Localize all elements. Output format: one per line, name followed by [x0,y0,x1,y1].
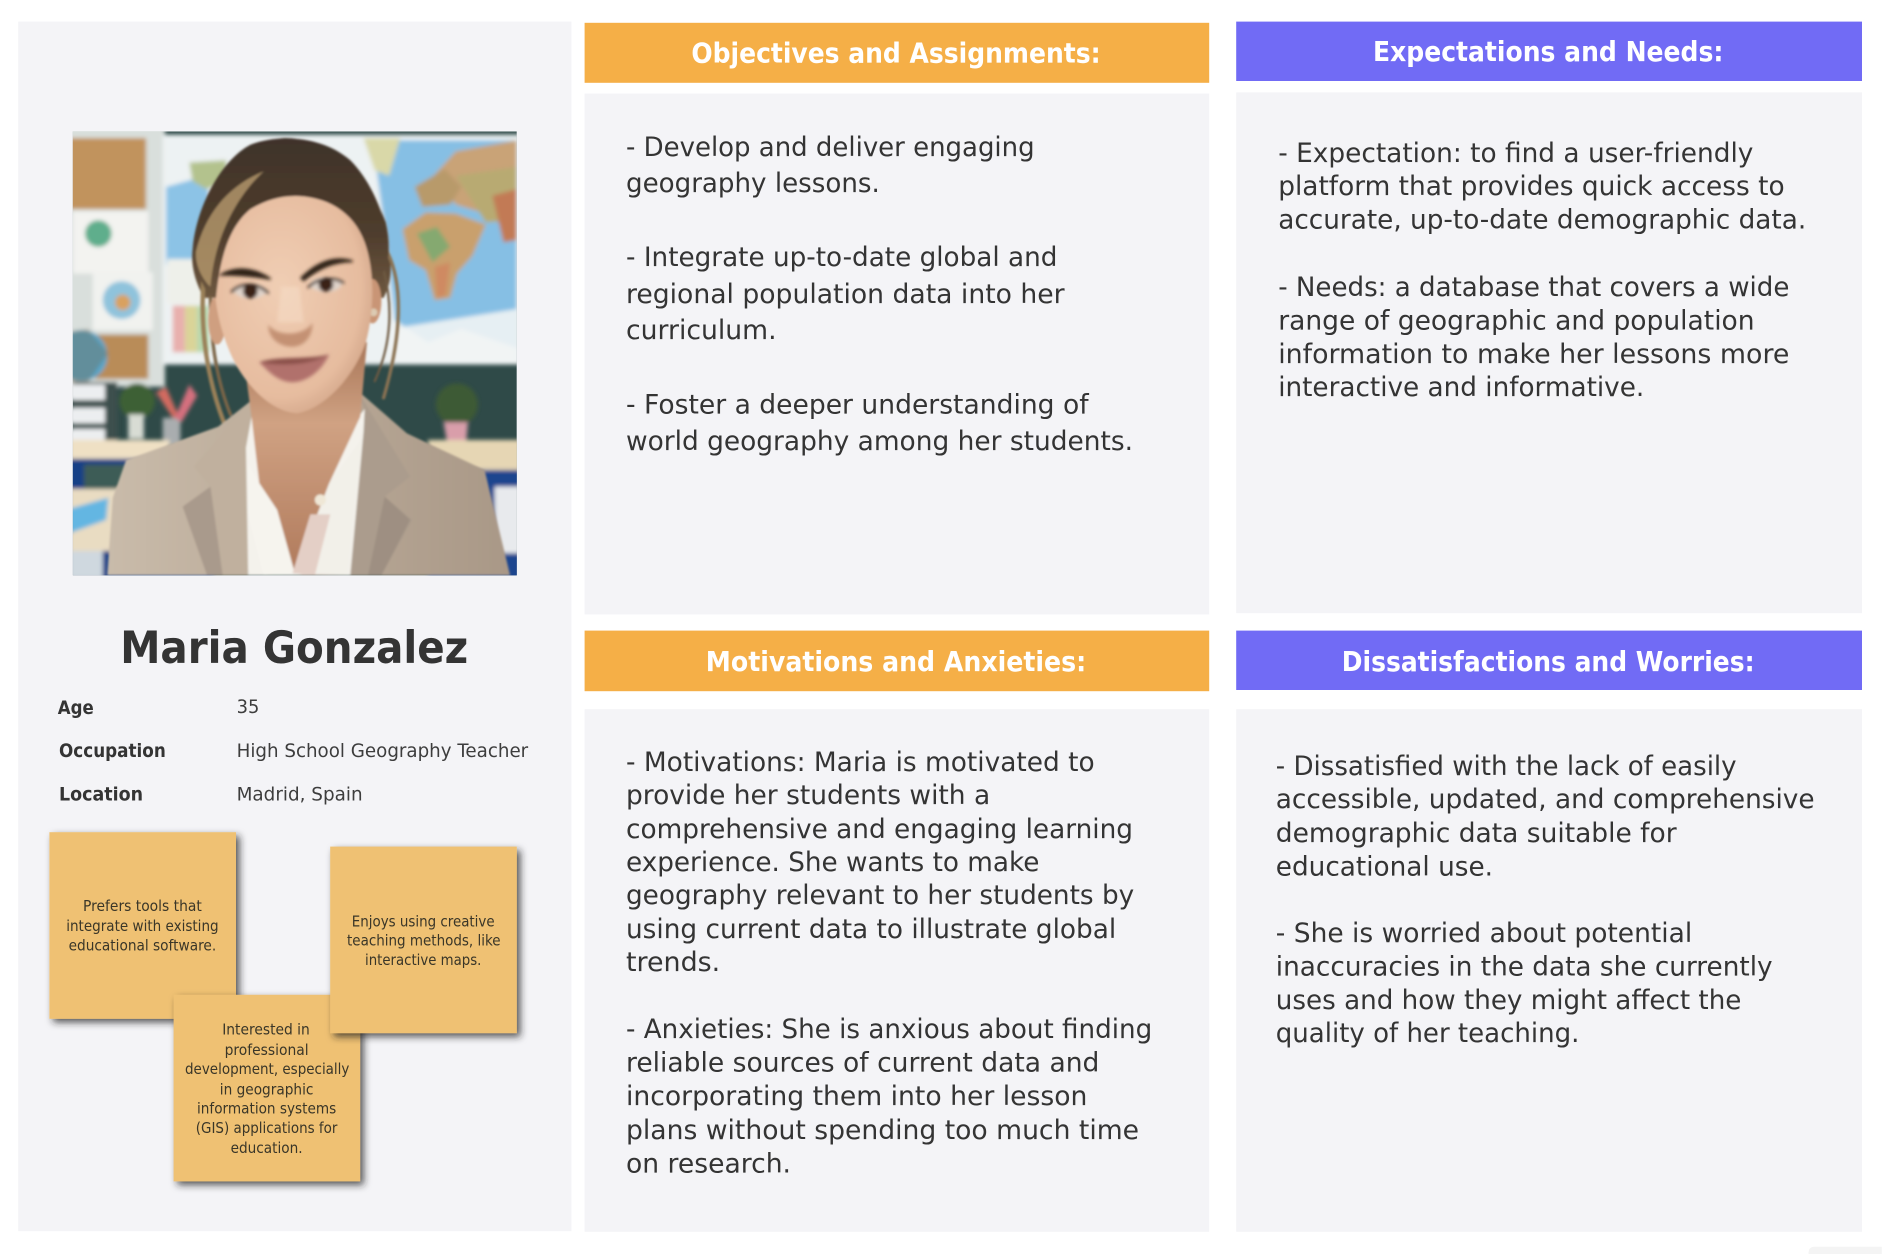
panel: dissatisfactions body: educational use. [1276,852,1493,882]
sticky note: teaching methods: Enjoys using creative [352,913,495,930]
shirt [246,409,365,575]
sticky note: professional development [174,995,360,1181]
lips [259,355,329,382]
details: occupation [59,741,529,762]
panel: motivations body: trends. [626,948,720,978]
panel: motivations body: geography relevant to her students by [626,881,1134,911]
details: occupation: Occupation [59,741,166,762]
eyes [235,284,266,298]
facial shading [277,287,304,322]
blazer [107,390,510,575]
sticky note: tools: Prefers tools that [83,898,202,915]
hair back [192,138,391,298]
panel: dissatisfactions header: Dissatisfactions and Worries: [1342,645,1755,678]
panel: dissatisfactions body: quality of her teaching. [1276,1019,1579,1049]
details: age [58,697,259,719]
details: location [59,784,363,805]
sticky note: professional development: in geographic [220,1081,313,1098]
brows [222,269,270,279]
sticky note: professional development: information systems [197,1101,336,1118]
panel: motivations header: Motivations and Anxieties: [706,645,1086,678]
details: location: Location [59,784,143,805]
details: age: Age [58,698,94,719]
panel: motivations body: plans without spending too much time [626,1116,1139,1146]
panel: objectives header [585,23,1209,83]
panel: motivations body: using current data to illustrate global [626,915,1116,945]
panel: expectations body [1236,92,1862,613]
details: occupation: High School Geography Teacher [237,741,529,762]
panel: motivations body: - Motivations: Maria is motivated to [626,748,1095,778]
sticky note: tools: educational software. [69,937,216,954]
panel: motivations header [585,631,1209,691]
panel: dissatisfactions body [1236,709,1862,1232]
panel: expectations body: range of geographic and population [1278,306,1755,336]
panel: expectations body: accurate, up-to-date demographic data. [1278,206,1806,236]
face [208,296,226,345]
sticky note: teaching methods: teaching methods, like [347,933,501,950]
panel: dissatisfactions header [1236,631,1862,690]
wall map [163,135,523,364]
sticky note: teaching methods [330,847,517,1033]
panel: motivations body: comprehensive and engaging learning [626,815,1133,845]
panel: dissatisfactions body: - Dissatisfied with the lack of easily [1276,752,1737,782]
hair front [194,138,389,298]
panel: motivations body [585,709,1209,1232]
details: age: 35 [237,697,259,718]
sticky note: professional development: (GIS) applications for [196,1120,338,1137]
panel: objectives body: - Integrate up-to-date global and [626,243,1057,273]
panel: motivations body: incorporating them into her lesson [626,1082,1087,1112]
loose wisps [203,254,398,422]
sticky note: professional development: professional [225,1042,309,1059]
panel: objectives body: geography lessons. [626,169,880,199]
panel: dissatisfactions body: - She is worried about potential [1276,919,1692,949]
panel: motivations body: experience. She wants to make [626,848,1039,878]
panel: objectives body: regional population data into her [626,280,1065,310]
panel: expectations body: platform that provides quick access to [1278,172,1785,202]
sticky note: teaching methods: interactive maps. [365,952,481,969]
details: location: Madrid, Spain [237,784,363,805]
panel: expectations body: interactive and informative. [1278,373,1644,403]
sticky note: tools [49,832,236,1019]
sticky note: professional development: education. [231,1140,303,1157]
neck [242,342,367,573]
panel: dissatisfactions body: uses and how they might affect the [1276,986,1741,1016]
panel: objectives header: Objectives and Assignments: [691,36,1101,69]
photo: teacher portrait in classroom [56,126,523,581]
panel: objectives body [585,94,1209,614]
heading: name: Maria Gonzalez [120,623,468,674]
panel: expectations header [1236,22,1862,81]
panel: motivations body: provide her students with a [626,781,990,811]
sticky note: professional development: development, especially [185,1061,350,1078]
sticky note: professional development: Interested in [222,1021,310,1038]
panel: motivations body: reliable sources of current data and [626,1049,1099,1079]
panel: objectives body: curriculum. [626,316,777,346]
panel: dissatisfactions body: inaccuracies in the data she currently [1276,953,1773,983]
panel: objectives body: world geography among her students. [626,427,1133,457]
panel: expectations header: Expectations and Needs: [1373,35,1723,68]
panel: motivations body: - Anxieties: She is anxious about finding [626,1015,1152,1045]
panel: objectives body: - Foster a deeper understanding of [626,390,1089,420]
panel: expectations body: information to make her lessons more [1278,340,1789,370]
panel: motivations body: on research. [626,1149,791,1179]
panel: dissatisfactions body: demographic data suitable for [1276,819,1677,849]
sticky note: tools: integrate with existing [66,918,219,935]
panel: profile [18,22,571,1231]
panel: dissatisfactions body: accessible, updated, and comprehensive [1276,785,1815,815]
panel: expectations body: - Needs: a database that covers a wide [1278,273,1789,303]
panel: objectives body: - Develop and deliver engaging [626,133,1035,163]
panel: expectations body: - Expectation: to find a user-friendly [1278,139,1753,169]
